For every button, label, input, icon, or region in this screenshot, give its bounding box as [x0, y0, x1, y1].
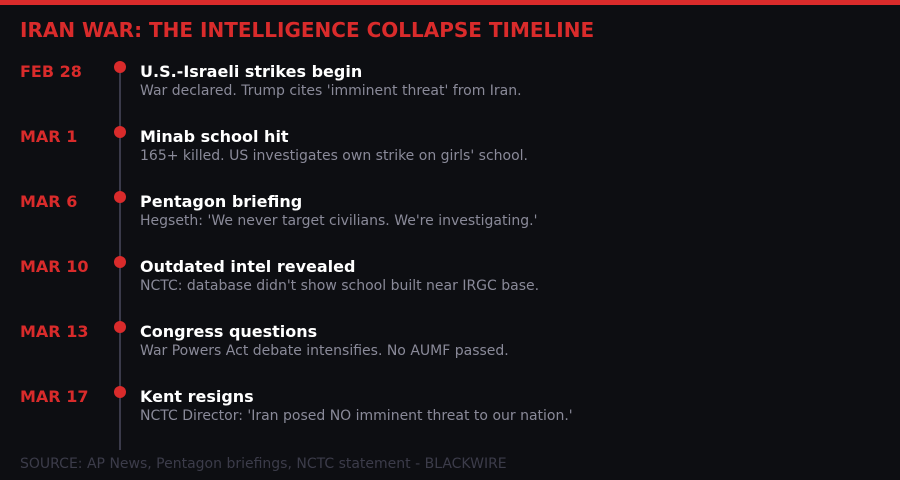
event: Mar 13: Congress questions: [140, 322, 317, 341]
event: Mar 6: [20, 191, 537, 229]
event: Mar 10: NCTC: database didn't show school built near IRGC base.: [140, 278, 539, 294]
event: Mar 13: [20, 321, 509, 359]
top bar: [0, 0, 900, 5]
event: Mar 6: Hegseth: 'We never target civilians. We're investigating.': [140, 213, 537, 229]
event: Mar 1: 165+ killed. US investigates own strike on girls' school.: [140, 148, 528, 164]
event: Mar 6: Pentagon briefing: [140, 192, 302, 211]
event: Feb 28: [20, 61, 522, 99]
event: Mar 17: MAR 17: [20, 387, 88, 406]
source: SOURCE: AP News, Pentagon briefings, NCTC statement - BLACKWIRE: [20, 456, 507, 472]
timeline line: [119, 72, 121, 450]
event: Mar 10: MAR 10: [20, 257, 88, 276]
event: Mar 10: Outdated intel revealed: [140, 257, 355, 276]
event: Mar 17: NCTC Director: 'Iran posed NO imminent threat to our nation.': [140, 408, 573, 424]
event: Mar 1: Minab school hit: [140, 127, 289, 146]
event: Mar 6: MAR 6: [20, 192, 77, 211]
event: Mar 13: MAR 13: [20, 322, 88, 341]
event: Feb 28: War declared. Trump cites 'imminent threat' from Iran.: [140, 83, 522, 99]
event: Mar 17: Kent resigns: [140, 387, 254, 406]
event: Mar 10: [20, 256, 539, 294]
title: IRAN WAR: THE INTELLIGENCE COLLAPSE TIMELINE: [20, 18, 594, 42]
event: Feb 28: FEB 28: [20, 62, 82, 81]
event: Feb 28: U.S.-Israeli strikes begin: [140, 62, 362, 81]
event: Mar 17: [20, 386, 573, 424]
event: Mar 1: MAR 1: [20, 127, 77, 146]
event: Mar 1: [20, 126, 528, 164]
event: Mar 13: War Powers Act debate intensifies. No AUMF passed.: [140, 343, 509, 359]
